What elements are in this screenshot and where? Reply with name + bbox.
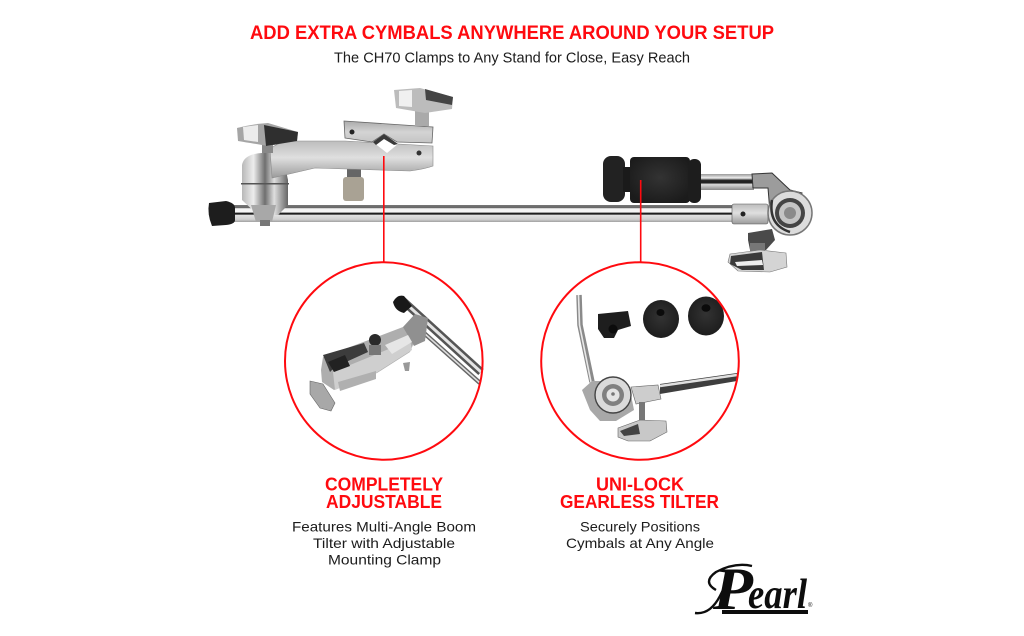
black wing nut <box>598 311 631 338</box>
text block: tilter description <box>566 518 714 551</box>
logo: Pearl: ® <box>808 602 813 609</box>
felt washer 2 <box>688 296 724 336</box>
tilter arm <box>660 373 737 394</box>
tilter wing screw <box>728 243 787 272</box>
text block: tilter description: Cymbals at Any Angle <box>566 535 714 551</box>
tilter wing <box>618 402 667 441</box>
logo: Pearl <box>695 556 813 622</box>
clamp hub <box>241 152 289 226</box>
connector line: tilter <box>640 180 642 263</box>
text block: clamp description <box>292 518 476 568</box>
callout circle: tilter detail <box>541 262 739 460</box>
tilter pole highlight <box>578 295 591 382</box>
clamp arm <box>270 141 433 178</box>
tilter pole <box>579 295 592 382</box>
heading: completely adjustable <box>325 474 443 512</box>
top wing screw <box>394 88 453 126</box>
clamp hole <box>373 134 398 153</box>
tilter joint <box>732 173 812 250</box>
heading: uni-lock gearless tilter: GEARLESS TILTER <box>560 492 719 512</box>
clamp upper plate <box>344 121 433 143</box>
heading: uni-lock gearless tilter: UNI-LOCK <box>596 474 684 494</box>
clamp black knob <box>393 296 412 313</box>
tilter joint <box>582 377 634 421</box>
heading: uni-lock gearless tilter <box>560 474 719 512</box>
title: ADD EXTRA CYMBALS ANYWHERE AROUND YOUR SETUP <box>250 22 774 44</box>
circle outline: clamp <box>285 262 483 460</box>
text block: tilter description: Securely Positions <box>580 518 700 534</box>
circle outline: tilter <box>541 262 739 460</box>
logo: Pearl: earl <box>748 572 807 618</box>
clamp rod <box>402 300 481 383</box>
callout circle: clamp detail <box>285 262 483 460</box>
heading: completely adjustable: COMPLETELY <box>325 474 443 494</box>
knurled clamp screw <box>343 166 364 201</box>
logo: Pearl: P <box>712 556 754 622</box>
clamp wing <box>310 381 335 411</box>
tilter sleeve <box>631 385 661 404</box>
black end knob <box>208 201 235 226</box>
upper tube <box>700 174 754 190</box>
subtitle: The CH70 Clamps to Any Stand for Close, Easy Reach <box>334 50 690 66</box>
cymbal felt and sleeve <box>603 156 701 203</box>
left wing screw <box>237 123 298 153</box>
heading: completely adjustable: ADJUSTABLE <box>326 492 442 512</box>
text block: clamp description: Mounting Clamp <box>328 552 441 568</box>
connector line: clamp <box>383 156 385 263</box>
text block: clamp description: Features Multi-Angle Boom <box>292 518 476 534</box>
boom rod <box>230 205 735 222</box>
tilter arm highlight <box>660 375 737 386</box>
product photo: CH70 boom arm <box>208 88 812 272</box>
felt washer 1 <box>643 300 679 338</box>
text block: clamp description: Tilter with Adjustable <box>313 535 455 551</box>
clamp body <box>321 314 428 391</box>
